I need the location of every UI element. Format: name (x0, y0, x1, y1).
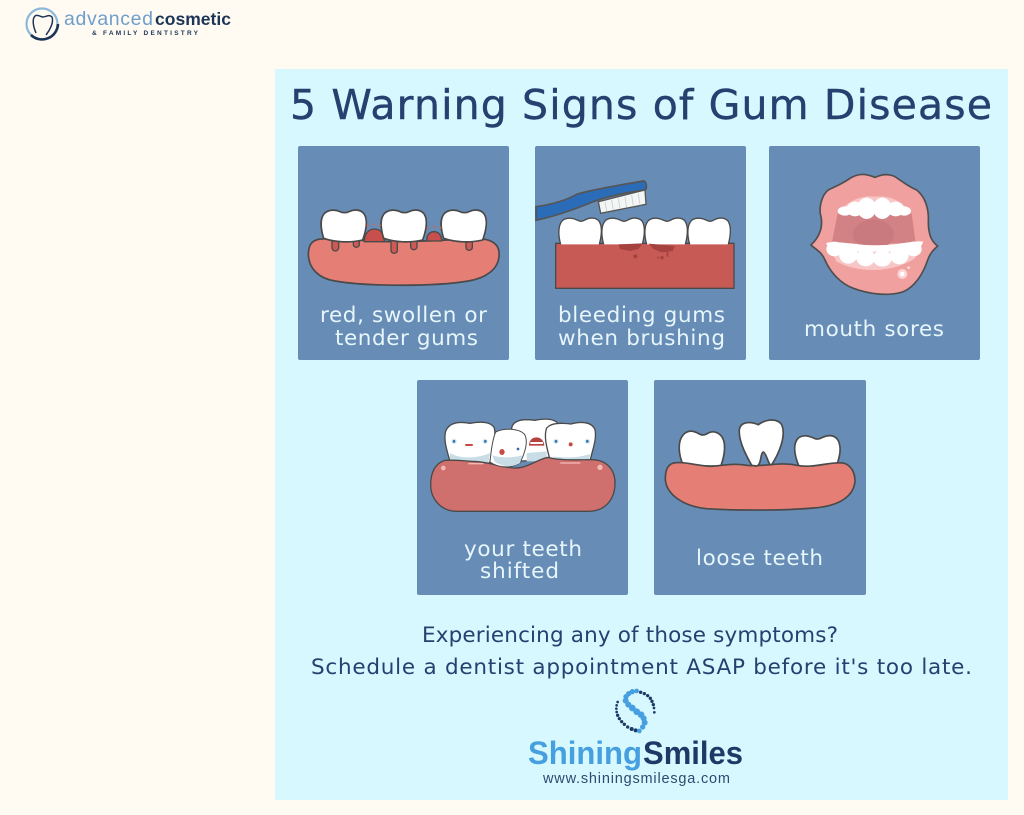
wordmark: Smiles (643, 735, 743, 771)
label (320, 303, 487, 351)
logo: advanced cosmetic (26, 8, 231, 40)
call to action text: Schedule a dentist appointment ASAP before it's too late. (311, 655, 972, 680)
wordmark (528, 735, 743, 771)
label: shifted (480, 559, 559, 584)
title: 5 Warning Signs of Gum Disease (290, 81, 992, 129)
label: bleeding gums (558, 303, 725, 328)
label: loose teeth (696, 546, 823, 571)
call to action text: Experiencing any of those symptoms? (422, 623, 838, 648)
logo wordmark: & FAMILY DENTISTRY (92, 30, 199, 37)
label (464, 537, 582, 584)
illustration: loose teeth (665, 420, 855, 510)
illustration: crowded shifted teeth (431, 419, 615, 511)
icon: dotted S ring (615, 689, 656, 733)
illustration: toothbrush and bleeding gums (536, 181, 734, 288)
label: when brushing (558, 326, 725, 351)
illustration: open mouth with sore (811, 174, 938, 294)
label: tender gums (335, 326, 478, 351)
panel: your teeth shifted (417, 380, 628, 595)
panel: bleeding gums when brushing (535, 146, 746, 360)
label: your teeth (464, 537, 582, 562)
panel: mouth sores (769, 146, 980, 360)
icon: tooth in circle (26, 8, 58, 40)
wordmark: Shining (528, 735, 642, 771)
logo wordmark: advanced (64, 8, 153, 30)
logo wordmark: cosmetic (155, 9, 231, 29)
illustration: swollen gums (308, 210, 499, 285)
logo: Shining Smiles (528, 689, 743, 787)
panel: red, swollen or tender gums (298, 146, 509, 360)
website: www.shiningsmilesga.com (542, 771, 730, 787)
logo wordmark (64, 8, 231, 37)
panel: main background (275, 69, 1008, 800)
panel: loose teeth (654, 380, 866, 595)
label: mouth sores (804, 317, 944, 342)
label (558, 303, 725, 351)
label: red, swollen or (320, 303, 487, 328)
call to action text (311, 623, 972, 680)
